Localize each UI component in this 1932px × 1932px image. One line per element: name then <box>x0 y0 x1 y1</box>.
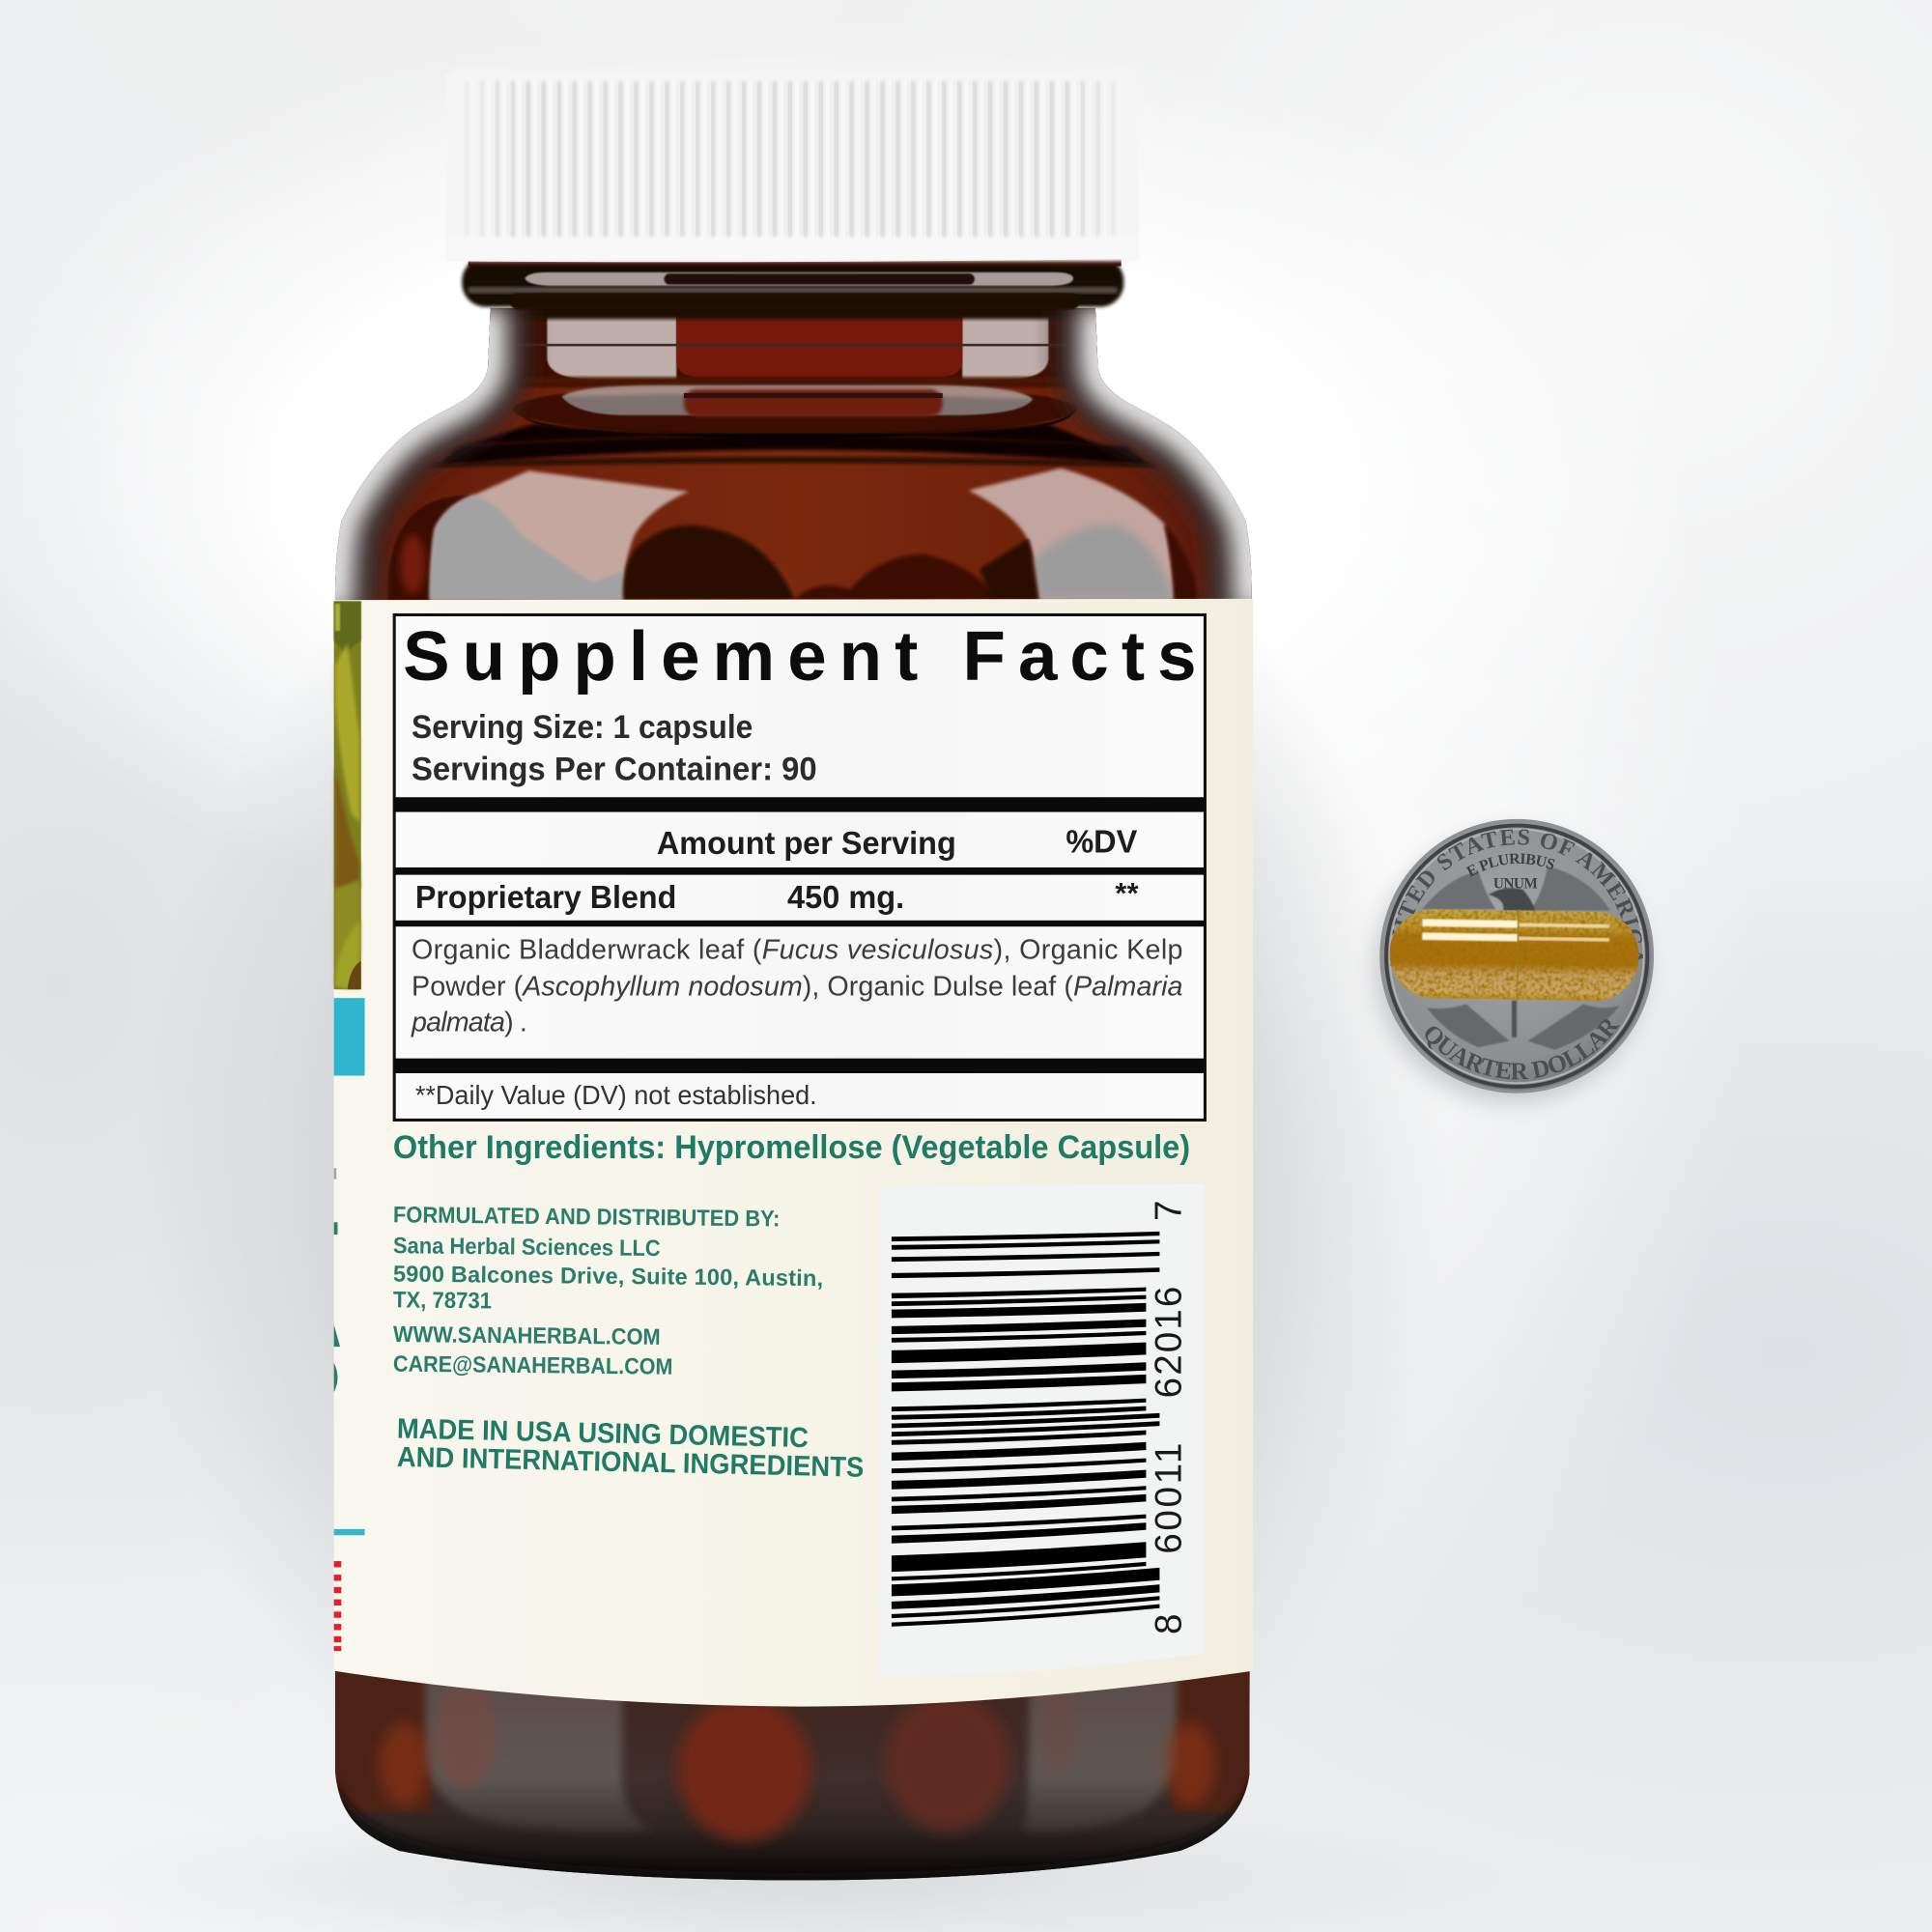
barcode digits: 7 <box>1149 1200 1190 1221</box>
quarter coin with capsule <box>1366 819 1656 1112</box>
coin lettering: QUARTER DOLLAR <box>1425 1019 1619 1080</box>
supplement facts panel <box>394 614 1205 1120</box>
bottom of bottle <box>335 1671 1250 1880</box>
distributor details: TX, 78731 <box>393 1287 492 1313</box>
capsules in shoulder <box>623 526 795 600</box>
ingredient list: palmata) . <box>411 1008 527 1038</box>
amber glass body <box>335 308 1252 1880</box>
thick rule <box>394 797 1205 812</box>
dark capsule crescent left <box>387 496 473 600</box>
made in USA note: MADE IN USA USING DOMESTIC <box>397 1413 809 1454</box>
made in USA note: AND INTERNATIONAL INGREDIENTS <box>397 1441 865 1484</box>
front label peek: teal line <box>334 1529 365 1535</box>
front label peek: seaweed image <box>334 601 361 989</box>
shoulder edge fade <box>335 308 1252 610</box>
barcode <box>878 1183 1205 1678</box>
front label peek: red dots <box>334 1561 341 1651</box>
distributor details: Sana Herbal Sciences LLC <box>393 1233 661 1261</box>
coin lettering: UNITED STATES OF AMERICA <box>1391 829 1643 966</box>
proprietary blend row: ** <box>1115 877 1139 910</box>
front label peek: teal block <box>334 998 365 1076</box>
ingredient list: Powder (Ascophyllum nodosum), Organic Dulse leaf (Palmaria <box>412 972 1182 1003</box>
heading: Supplement Facts: Supplement Facts <box>403 617 1197 696</box>
distributor details: 5900 Balcones Drive, Suite 100, Austin, <box>393 1262 823 1291</box>
dome shadow bands <box>438 436 1152 466</box>
amount per serving column head: Amount per Serving <box>657 826 956 862</box>
thick rule <box>394 1059 1205 1073</box>
lower neck ring <box>513 382 1077 437</box>
barcode digits: 62016 <box>1149 1287 1190 1398</box>
front label peek: letter fragments <box>334 1168 340 1392</box>
right reflection window <box>969 469 1175 600</box>
coin lettering: E PLURIBUS <box>1465 854 1555 877</box>
neck rim <box>462 258 1123 309</box>
barcode white panel <box>878 1183 1205 1678</box>
serving size: Serving Size: 1 capsule <box>412 709 753 746</box>
left reflection window <box>430 470 689 600</box>
label <box>334 599 1253 1707</box>
proprietary blend row: 450 mg. <box>787 880 904 916</box>
eagle <box>1422 867 1620 1050</box>
rule <box>394 867 1205 875</box>
rule <box>394 921 1205 926</box>
barcode digits: 60011 <box>1149 1443 1190 1554</box>
ingredient list <box>411 934 1182 1038</box>
servings per container: Servings Per Container: 90 <box>412 751 817 787</box>
barcode digits: 8 <box>1149 1613 1190 1634</box>
coin lettering: UNUM <box>1493 876 1538 893</box>
proprietary blend row: Proprietary Blend <box>415 880 676 916</box>
distributor details: WWW.SANAHERBAL.COM <box>393 1321 661 1350</box>
made in USA note <box>397 1413 865 1484</box>
distributor details: FORMULATED AND DISTRIBUTED BY: <box>393 1202 781 1231</box>
white ribbed cap <box>446 69 1139 262</box>
capsule <box>1389 907 1639 1003</box>
barcode digits <box>1149 1200 1190 1634</box>
proprietary blend row <box>415 877 1139 916</box>
ingredient list: Organic Bladderwrack leaf (Fucus vesiculosus), Organic Kelp <box>412 934 1182 965</box>
glass interior details <box>335 305 1253 1886</box>
bottle <box>334 69 1253 1886</box>
coin lettering <box>1391 829 1643 1080</box>
percent daily value column head: %DV <box>1065 825 1137 861</box>
daily value footnote: **Daily Value (DV) not established. <box>415 1080 817 1110</box>
coin disc <box>1381 820 1652 1092</box>
neck <box>488 305 1099 387</box>
coin shadow <box>1375 832 1646 1103</box>
other ingredients: Other Ingredients: Hypromellose (Vegetable Capsule) <box>393 1129 1190 1166</box>
distributor details: CARE@SANAHERBAL.COM <box>393 1351 673 1379</box>
distributor details <box>393 1202 823 1379</box>
barcode bars <box>892 1232 1159 1626</box>
